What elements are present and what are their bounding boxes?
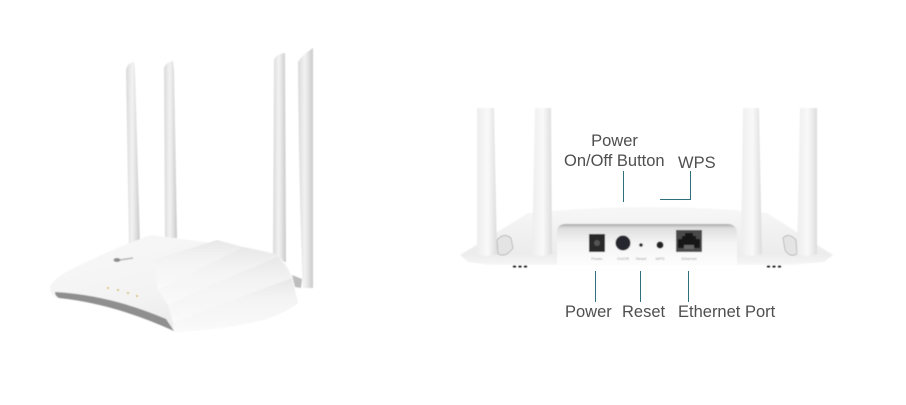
antenna: front right [273, 53, 286, 262]
port: ethernet [676, 230, 702, 252]
antenna: rear 4 [797, 108, 817, 256]
small port labels: Reset [636, 256, 647, 261]
callout: power: Power [565, 303, 612, 321]
small port labels: WPS [655, 256, 665, 261]
callout: power [565, 271, 612, 321]
panel: router front view [50, 48, 313, 332]
small port labels: Power [591, 256, 603, 261]
panel: router rear view [460, 108, 833, 266]
LED indicators [107, 287, 138, 297]
callout: reset: Reset [622, 303, 666, 321]
bottom foot dots right [767, 266, 781, 268]
body facets [153, 240, 298, 332]
port: reset [639, 243, 643, 247]
callout: power on/off button [564, 132, 665, 202]
antenna hinge [292, 275, 302, 288]
antenna: rear 2 [532, 108, 552, 256]
antenna: front far right [298, 48, 313, 288]
port: power jack [589, 234, 605, 252]
rear housing [460, 207, 833, 265]
callout: ethernet port [678, 271, 776, 321]
antenna hinge right [783, 235, 797, 255]
vent grille [55, 292, 174, 331]
callout: power on/off button: On/Off Button [564, 152, 665, 170]
logo [114, 258, 133, 262]
callout: reset [622, 271, 666, 321]
antenna: rear 3 [741, 108, 762, 256]
router body [50, 235, 298, 332]
callout: WPS [660, 154, 716, 200]
antenna: rear 1 [477, 108, 497, 256]
antenna: front left [164, 61, 177, 238]
port: WPS [656, 242, 664, 248]
small port labels [591, 256, 697, 261]
bottom foot dots left [513, 266, 527, 268]
antenna hinge left [497, 235, 513, 255]
small port labels: Ethernet [681, 256, 697, 261]
callout: ethernet port: Ethernet Port [678, 303, 776, 321]
port: on/off button [616, 236, 630, 250]
port recess [557, 224, 737, 265]
callout: power on/off button: Power [591, 132, 638, 150]
small port labels: On/Off [617, 256, 630, 261]
antenna: front far left [126, 62, 140, 247]
callout: WPS: WPS [678, 154, 716, 172]
